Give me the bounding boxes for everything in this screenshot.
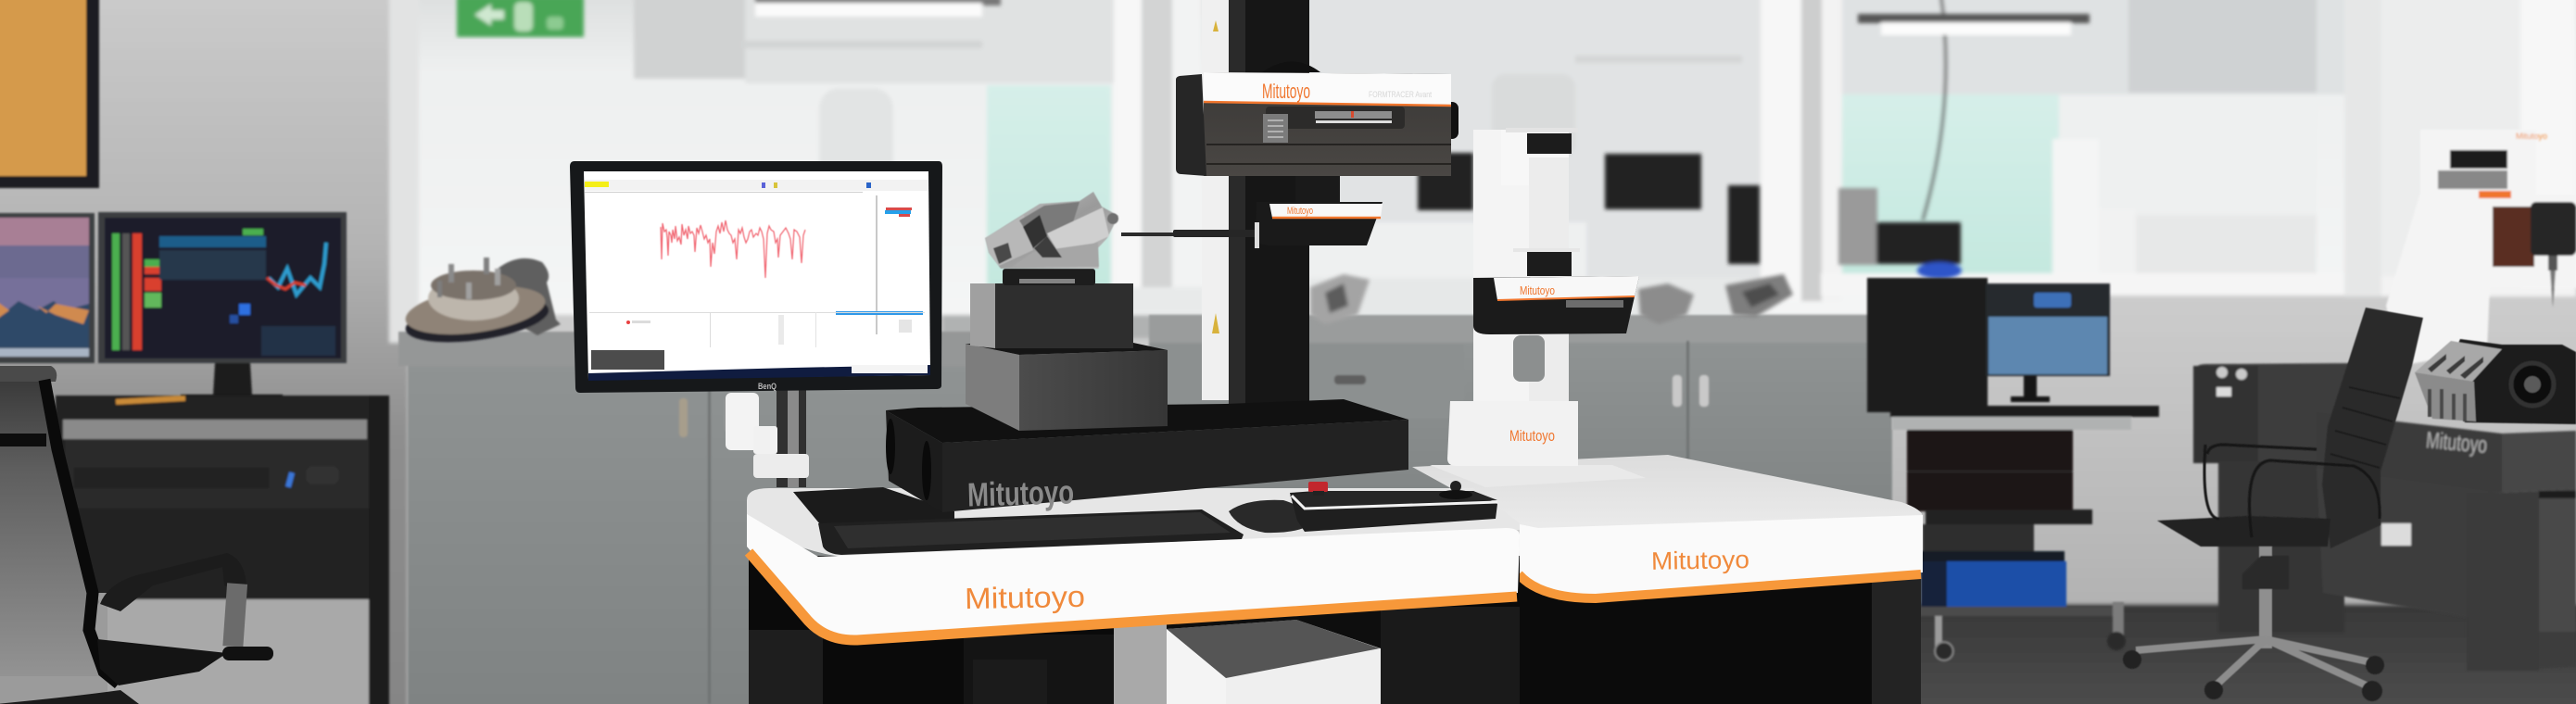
sidebar [876, 195, 912, 334]
stacked riser blocks [966, 283, 1168, 431]
icon: green exit sign [457, 0, 584, 37]
engine block [2415, 339, 2576, 424]
keyboard mat [793, 487, 954, 530]
panel: gray counter and cabinets [398, 315, 1925, 704]
logo: second desk: Mitutoyo [1651, 546, 1749, 575]
desk front band [747, 514, 1520, 639]
workpiece: gear casting [985, 192, 1118, 269]
logo: detector: Mitutoyo [1287, 206, 1313, 217]
logo: base: Mitutoyo [967, 472, 1075, 513]
logo: main desk: Mitutoyo [965, 580, 1085, 615]
desk top surface [747, 488, 1520, 558]
second desk [1412, 455, 1923, 704]
monitor arm [726, 389, 809, 487]
chart: red roughness trace [661, 220, 805, 278]
logo: plinth: Mitutoyo [1509, 427, 1555, 445]
logo: head: Mitutoyo [1262, 80, 1310, 103]
PC tower [1867, 278, 1988, 412]
brand label: BenQ [758, 382, 777, 391]
main desk [747, 488, 1520, 704]
background monitors seen through glass [1418, 153, 1962, 279]
cart monitor [1986, 283, 2110, 402]
parts on counter: blurred castings [1310, 274, 1793, 324]
main instrument: white tower and column [1202, 0, 1340, 406]
keyboard [818, 509, 1244, 555]
panel: background coordinate machine [2386, 130, 2576, 366]
second instrument: detector head [1473, 276, 1639, 334]
results table [589, 311, 925, 347]
software toolbar [585, 180, 928, 193]
under-desk cabinet [749, 556, 1520, 704]
taskbar [588, 365, 930, 381]
orange edge [749, 552, 1517, 640]
mouse [1229, 500, 1311, 533]
panel: gray machine table [2193, 363, 2576, 671]
second instrument: white stand [1430, 128, 1646, 487]
parts on counter: brake disc [402, 258, 561, 350]
logo: machine table: Mitutoyo [2425, 427, 2488, 459]
main instrument: measuring head [1176, 72, 1458, 176]
right chair [2123, 308, 2423, 701]
panel: computer cart [1867, 278, 2159, 660]
display scale [1263, 107, 1405, 143]
main monitor [570, 161, 942, 393]
plinth [1447, 401, 1578, 466]
monitor: mountain wallpaper [0, 213, 95, 363]
monitor: trading chart [98, 212, 347, 363]
rotary table ring [1003, 269, 1095, 285]
panel: left monitors [0, 212, 347, 400]
notification box [591, 350, 664, 370]
main instrument: black base [886, 399, 1408, 513]
left chair [0, 366, 273, 704]
panel: left desk [56, 396, 389, 704]
blue case [1921, 551, 2066, 612]
caliper [498, 258, 561, 335]
cork board [0, 0, 99, 188]
upper block [970, 283, 1133, 348]
control box [1290, 481, 1497, 532]
logo: detector head: Mitutoyo [1520, 283, 1555, 297]
main instrument: detector with stylus [1121, 202, 1383, 248]
monitor stand [181, 363, 283, 400]
label: model: FORMTRACER Avant [1369, 90, 1432, 99]
ceiling lights [755, 0, 2090, 35]
lower block [966, 343, 1168, 431]
panel: background coordinate machine: Mitutoyo [2516, 132, 2547, 141]
